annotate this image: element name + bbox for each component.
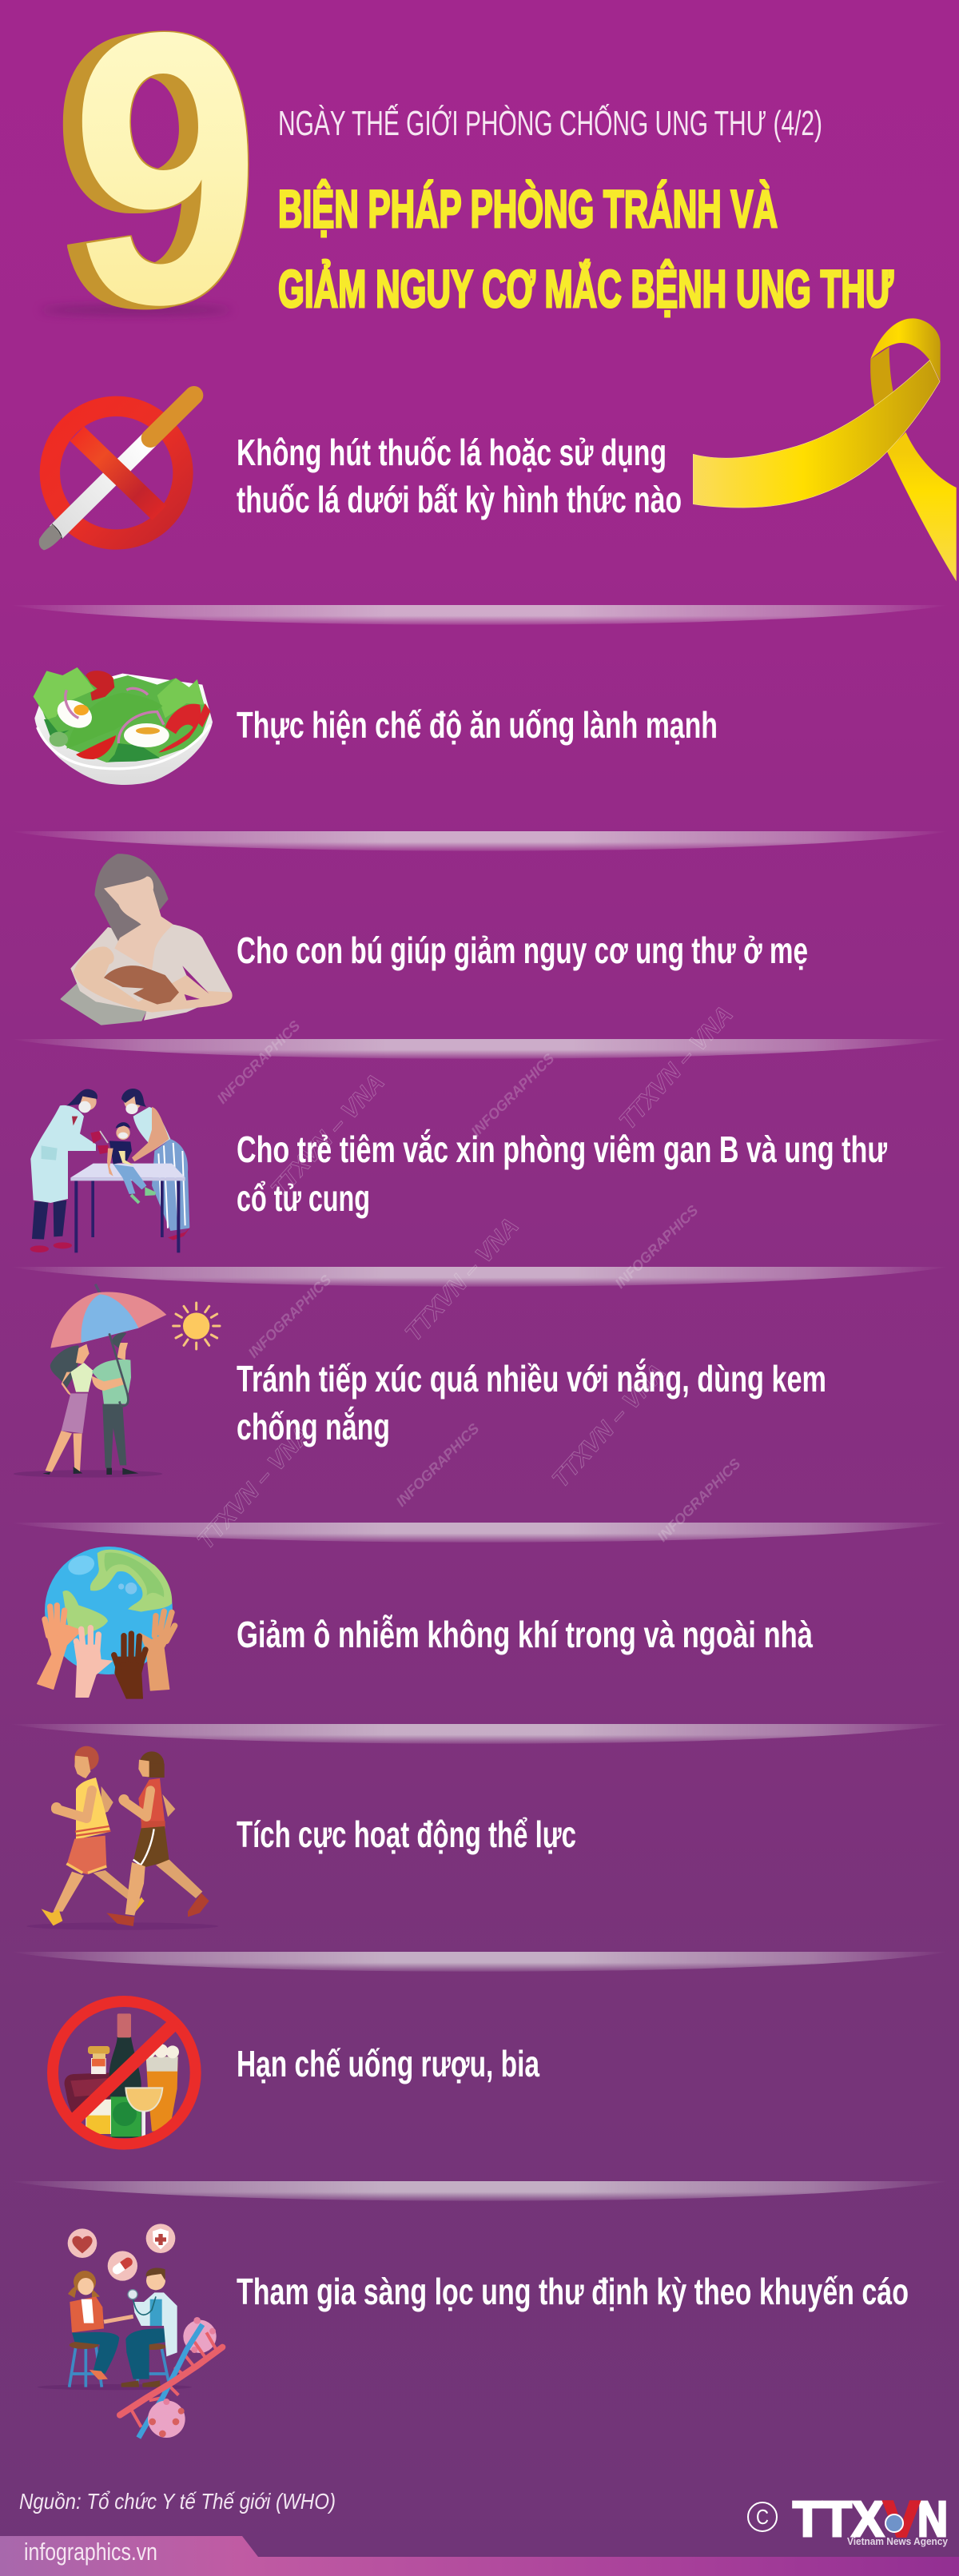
icon: doctor and patient with DNA [38,2224,222,2438]
panel: item 9 cancer screening [38,2224,909,2438]
panel: item 2 healthy diet [34,667,718,785]
panel: item 7 physical activity [26,1746,576,1930]
copyright mark [748,2502,777,2531]
watermarks: TTXVN – VNA [400,1213,524,1347]
wordmark: N [917,2492,948,2547]
watermarks: INFOGRAPHICS [214,1017,303,1107]
panel: item 5 sun protection [14,1284,826,1478]
icon: breastfeeding mother [62,854,233,1025]
icon: vaccination scene [30,1089,190,1252]
logo: TTXVN [748,2492,949,2547]
text: Thực hiện chế độ ăn uống lành mạnh [237,704,718,746]
wordmark: Vietnam News Agency [847,2535,949,2547]
wordmark: V [884,2492,919,2547]
watermarks: INFOGRAPHICS [612,1202,701,1292]
panel: item 1 no smoking [39,396,682,550]
icon: yellow ribbon [693,318,957,581]
text: Không hút thuốc lá hoặc sử dụng [237,432,667,473]
icon: salad bowl [34,667,213,785]
bottom band [0,2536,959,2576]
watermarks [193,1001,743,1555]
icon: couple under umbrella with sun [14,1284,220,1478]
icon: no alcohol [53,2001,196,2144]
watermarks: INFOGRAPHICS [393,1420,482,1510]
text: cổ tử cung [237,1177,370,1219]
icon: no smoking [39,396,194,550]
watermarks: TTXVN – VNA [615,1001,738,1135]
watermarks: TTXVN – VNA [266,1069,390,1203]
panel: item 8 limit alcohol [53,2001,539,2144]
text: chống nắng [237,1406,390,1447]
panel: item 4 vaccination [30,1089,888,1252]
panel: item 6 air pollution [38,1547,813,1698]
icon: two runners [26,1746,218,1930]
text: Tích cực hoạt động thể lực [237,1814,576,1855]
watermarks: TTXVN – VNA [193,1421,316,1555]
text [237,1358,826,1447]
wordmark: TTX [793,2492,884,2547]
title block [278,102,893,318]
text: Hạn chế uống rượu, bia [237,2043,539,2084]
watermarks: TTXVN – VNA [547,1360,671,1493]
source note: Nguồn: Tổ chức Y tế Thế giới (WHO) [19,2489,336,2514]
watermarks: INFOGRAPHICS [245,1272,334,1361]
watermarks: INFOGRAPHICS [468,1050,557,1140]
wordmark [793,2492,949,2547]
icon: globe held by hands [38,1547,175,1698]
website: infographics.vn [24,2538,157,2566]
text [237,1129,888,1219]
panel: item 3 breastfeeding [62,854,808,1025]
watermarks: INFOGRAPHICS [655,1455,743,1545]
text: thuốc lá dưới bất kỳ hình thức nào [237,479,682,520]
text [237,432,682,520]
copyright mark: C [756,2505,769,2529]
